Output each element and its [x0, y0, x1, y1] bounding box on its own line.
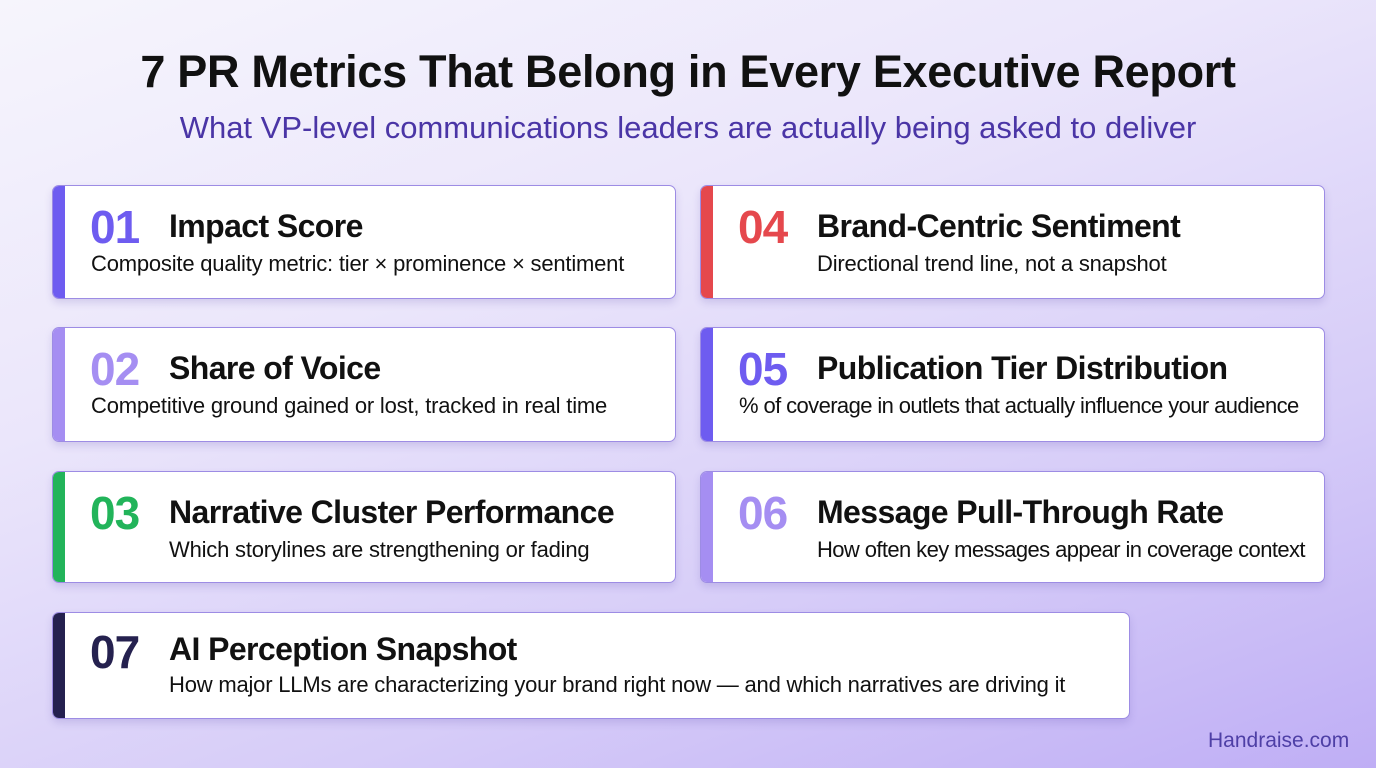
card 04 — [700, 185, 1325, 299]
card 05 — [700, 327, 1325, 442]
footer brand: Handraise.com — [1208, 729, 1349, 752]
card 07: AI Perception Snapshot — [169, 631, 517, 667]
card 01: 01 — [90, 201, 139, 253]
subtitle: What VP-level communications leaders are actually being asked to deliver — [180, 110, 1196, 145]
card 04: Directional trend line, not a snapshot — [817, 251, 1167, 276]
card 06 — [700, 471, 1325, 583]
card 04: Brand-Centric Sentiment — [817, 208, 1180, 244]
card 02: Competitive ground gained or lost, tracked in real time — [91, 393, 607, 418]
card 07: 07 — [90, 626, 139, 678]
card 01: Composite quality metric: tier × prominence × sentiment — [91, 251, 624, 276]
card 02 — [52, 327, 676, 442]
card 06: 06 — [738, 487, 787, 539]
card 02: 02 — [90, 343, 139, 395]
card 05: Publication Tier Distribution — [817, 350, 1227, 386]
card 03: Which storylines are strengthening or fading — [169, 537, 589, 562]
card 01 — [52, 185, 676, 299]
card 06: Message Pull-Through Rate — [817, 494, 1223, 530]
card 03: Narrative Cluster Performance — [169, 494, 614, 530]
card 07 — [52, 612, 1130, 719]
card 02: Share of Voice — [169, 350, 381, 386]
card 07: How major LLMs are characterizing your brand right now — and which narratives are driving it — [169, 672, 1065, 697]
card 04: 04 — [738, 201, 787, 253]
card 05: % of coverage in outlets that actually influence your audience — [739, 393, 1299, 418]
title: 7 PR Metrics That Belong in Every Executive Report — [140, 46, 1236, 97]
card 01: Impact Score — [169, 208, 363, 244]
card 03 — [52, 471, 676, 583]
card 06: How often key messages appear in coverage context — [817, 537, 1305, 562]
card 05: 05 — [738, 343, 787, 395]
card 03: 03 — [90, 487, 139, 539]
